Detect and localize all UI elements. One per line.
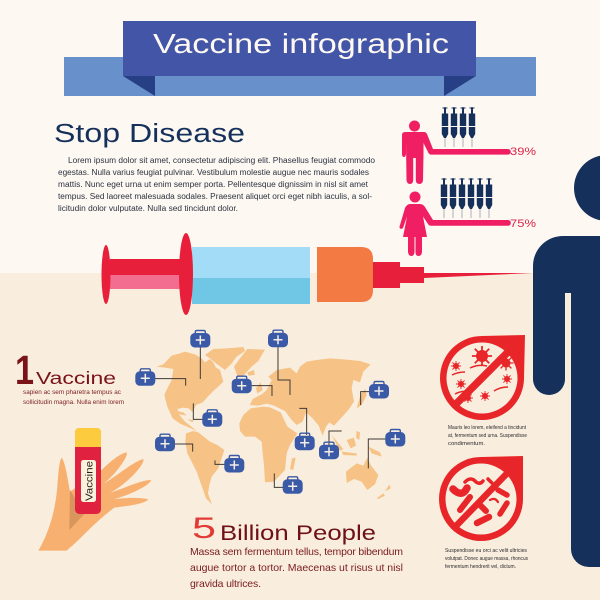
map: Madagascar (290, 458, 296, 470)
caption: viruses (448, 425, 527, 447)
background: lower beige band (0, 273, 600, 600)
body text: 5 billion people: gravida ultrices. (190, 578, 261, 590)
map: Africa (239, 407, 297, 482)
body text: 5 billion people: augue tortor a tortor. Maecenas ut risus ut nisl (190, 562, 403, 574)
location markers: medical kits (135, 330, 405, 494)
map: Eurasia (250, 358, 371, 436)
hand holding vaccine vial: Vaccine (84, 461, 96, 501)
caption: bacteria (445, 548, 528, 570)
hand holding vaccine vial (38, 428, 151, 551)
intro paragraph (58, 156, 376, 213)
title banner (64, 21, 536, 96)
caption: bacteria: fermentum hendrerit vel, dictum. (445, 564, 516, 570)
label: 39%: 39% (510, 146, 536, 158)
icon: no bacteria (439, 456, 523, 541)
map: British Isles and Iceland (247, 370, 263, 393)
icon: woman with bar (400, 192, 511, 256)
intro paragraph: mattis. Nunc eget urna ut enim semper porta. Pellentesque dignissim in nisl sit amet (58, 180, 369, 189)
caption: viruses: Mauris leo lorem, eleifend a tincidunt (448, 425, 527, 431)
map: North America (157, 352, 223, 431)
heading: 5 Billion People: 5 (192, 512, 216, 545)
map: New Zealand (377, 484, 391, 499)
heading: 5 Billion People (192, 512, 376, 545)
intro paragraph: licitudin dolor vulputate. Nulla sed tincidunt dolor. (58, 204, 238, 213)
caption: viruses: at, fermentum sed urna. Suspendisse (448, 433, 527, 439)
map: Central America islands (177, 411, 194, 422)
map: Arctic islands (205, 347, 245, 370)
statistic: women vaccinated 75% (400, 178, 536, 256)
body text: 5 billion people: Massa sem fermentum tellus, tempor bibendum (190, 546, 403, 558)
world map (153, 345, 391, 504)
heading: 1 Vaccine: Vaccine (36, 368, 116, 388)
caption: bacteria: volutpat. Donec augue massa, rhoncus (445, 556, 528, 562)
title banner: Vaccine infographic (153, 28, 449, 59)
icon: four syringes (442, 107, 475, 147)
icon: vial (75, 428, 101, 514)
map: Australia (346, 458, 378, 490)
statistic: men vaccinated 39% (402, 107, 536, 184)
vaccine caption (23, 390, 124, 406)
heading: 1 Vaccine (15, 347, 116, 393)
label: 75%: 75% (510, 218, 536, 230)
icon: no viruses (440, 335, 525, 420)
heading: 1 Vaccine: 1 (15, 347, 34, 393)
heading: Stop Disease: Stop Disease (54, 120, 245, 148)
large syringe (102, 233, 533, 315)
heading: 5 Billion People: Billion People (220, 522, 376, 545)
map: South-East Asia islands (332, 431, 382, 457)
intro paragraph: Lorem ipsum dolor sit amet, consectetur adipiscing elit. Phasellus feugiat commodo (68, 156, 376, 165)
map: Greenland (234, 349, 265, 376)
large dark person figure (533, 155, 600, 567)
caption: bacteria: Suspendisse eu orci ac velit ultricies (445, 548, 527, 554)
caption: viruses: condimentum. (448, 441, 485, 447)
body text: 5 billion people (190, 546, 403, 590)
icon: man with bar (402, 120, 511, 184)
vaccine caption: sollicitudin magna. Nulla enim lorem (23, 400, 124, 406)
intro paragraph: tempus. Sed laoreet malesuada sodales. Praesent aliquet orci eget nibh iaculis, a sol- (58, 192, 372, 201)
intro paragraph: egestas. Nulla varius feugiat pulvinar. Vestibulum molestie augue nec mauris sodales (58, 168, 369, 177)
map: Japan (357, 389, 367, 408)
map: South America (185, 431, 224, 504)
icon: six syringes (441, 178, 492, 218)
icon: hand (38, 452, 151, 551)
vaccine caption: sapien ac sem pharetra tempus ac (23, 390, 121, 396)
leader lines (153, 345, 387, 487)
